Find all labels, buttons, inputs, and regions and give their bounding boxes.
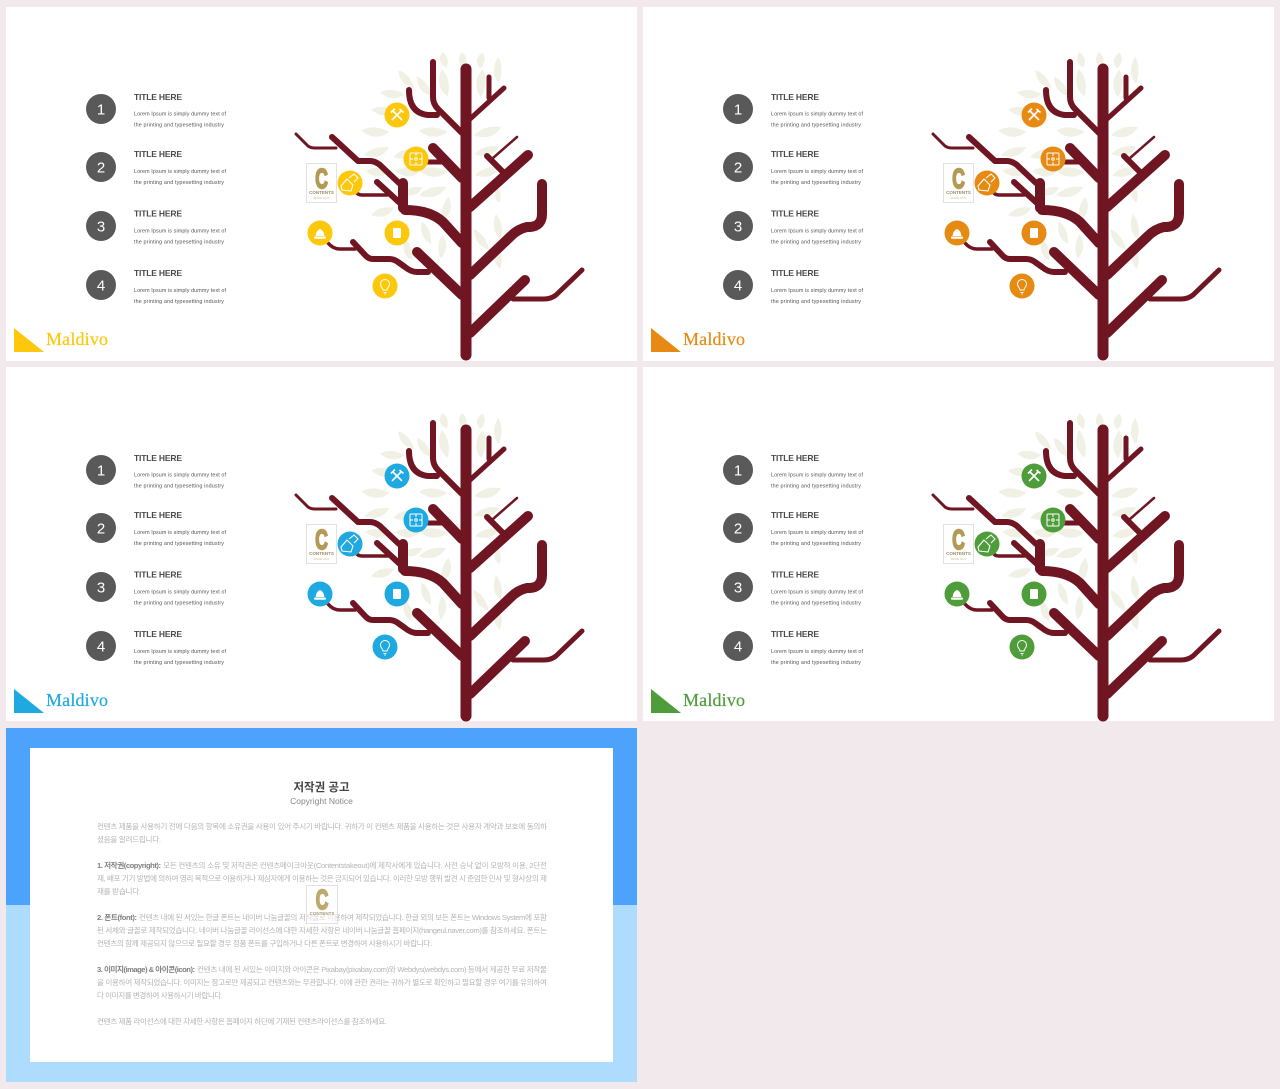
numbered list: the printing and typesetting industry [134,122,224,128]
contents badge [944,163,974,202]
numbered list: Lorem Ipsum is simply dummy text of [134,530,226,536]
numbered list: TITLE HERE [771,510,819,520]
numbered list [86,453,226,666]
heading: copyright: 저작권 공고 [293,780,350,794]
numbered list: 3 [734,580,742,596]
tree illustration [933,51,1219,355]
numbered list: TITLE HERE [134,149,182,159]
notice body text: 컨텐츠 내에 된 서있는 한글 폰트는 네이버 나눔글꼴의 저작물로 이용하여 제작되었습니다. 한글 외의 보든 폰트는 Windows System에 포함 [139,912,547,922]
logo: Maldivo [651,328,745,352]
numbered list: Lorem Ipsum is simply dummy text of [134,169,226,175]
logo: Maldivo: Maldivo [683,329,745,349]
icon markers [944,464,1066,660]
contents badge: MAKE OUT [951,557,966,561]
logo: Maldivo [651,689,745,713]
numbered list: the printing and typesetting industry [771,180,861,186]
numbered list: 4 [97,638,105,656]
tree illustration [296,412,582,716]
logo: Maldivo: Maldivo [46,690,108,710]
contents badge: C [952,163,965,194]
numbered list: TITLE HERE [134,92,182,102]
contents badge watermark: C [316,884,328,915]
heading: copyright [290,780,353,806]
numbered list: TITLE HERE [771,149,819,159]
notice body text: 을 이용하여 제작되었습니다. 이미지는 참고로만 제공되고 컨텐츠와는 무관합니다. 이에 관한 권리는 귀하가 별도로 확인하고 필요할 경우 여기를 유의하여 [97,977,547,987]
numbered list: Lorem Ipsum is simply dummy text of [134,288,226,294]
numbered list: TITLE HERE [771,453,819,463]
contents badge: C [315,524,328,555]
numbered list: 3 [97,218,105,236]
numbered list: the printing and typesetting industry [134,484,224,490]
numbered list: Lorem Ipsum is simply dummy text of [771,228,864,234]
numbered list [723,453,864,666]
numbered list: TITLE HERE [134,453,182,463]
logo: Maldivo [14,328,108,352]
contents badge: MAKE OUT [314,196,329,200]
contents badge: CONTENTS [946,190,971,195]
numbered list: the printing and typesetting industry [771,600,861,606]
contents badge: CONTENTS [946,551,971,556]
numbered list: 2 [734,520,742,538]
contents badge: CONTENTS [309,551,334,556]
numbered list: the printing and typesetting industry [134,299,224,305]
logo: Maldivo [14,689,108,713]
numbered list: Lorem Ipsum is simply dummy text of [134,590,226,596]
numbered list: 1 [97,462,105,480]
notice body text: 1. 저작권(copyright): [97,860,161,870]
numbered list: Lorem Ipsum is simply dummy text of [771,169,864,175]
contents badge: C [952,524,965,555]
numbered list: the printing and typesetting industry [134,180,224,186]
notice body text: 컨텐츠의 함께 제공되지 않으므로 필요할 경우 정품 폰트를 구입하거나 다른 폰트로 변경하여 사용하시기 바랍니다. [97,938,432,948]
heading: copyright: Copyright Notice [290,796,353,806]
numbered list: Lorem Ipsum is simply dummy text of [134,649,226,655]
tree illustration [296,51,582,355]
contents badge: MAKE OUT [951,196,966,200]
numbered list: TITLE HERE [771,570,819,580]
numbered list: TITLE HERE [134,208,182,218]
numbered list: TITLE HERE [771,92,819,102]
numbered list [723,92,864,305]
numbered list: TITLE HERE [771,208,819,218]
numbered list: 3 [97,580,105,596]
numbered list: the printing and typesetting industry [134,600,224,606]
numbered list: the printing and typesetting industry [771,660,861,666]
numbered list: 4 [734,278,742,294]
numbered list: 2 [97,520,105,538]
contents badge: CONTENTS [309,190,334,195]
numbered list: TITLE HERE [134,570,182,580]
notice body text: 2. 폰트(font): [97,913,137,922]
numbered list: the printing and typesetting industry [134,660,224,666]
contents badge: C [315,163,328,194]
numbered list: 2 [97,160,105,176]
numbered list: TITLE HERE [771,268,819,278]
panel: copyright notice [6,728,637,1082]
numbered list: TITLE HERE [134,629,182,639]
contents badge: MAKE OUT [314,557,329,561]
panel: yellow slide [6,7,637,361]
numbered list: Lorem Ipsum is simply dummy text of [771,112,864,118]
logo: Maldivo: Maldivo [46,329,108,349]
numbered list: 1 [734,462,742,480]
contents badge watermark [306,884,338,924]
numbered list: Lorem Ipsum is simply dummy text of [771,288,864,294]
numbered list: 3 [734,218,742,236]
notice body text: 컨텐츠 내에 된 서있는 이미지와 아이콘은 Pixabay(pixabay.com)와 Webdys(webdys.com) 등에서 제공한 무료 저작물 [197,964,547,974]
notice body text: 모든 컨텐츠의 소유 및 저작권은 컨텐츠메이크아웃(Contentstakeout)에 제작사에게 있습니다. 사전 승낙 없이 모방적 이용, 2단전 [163,860,547,870]
contents badge [306,524,336,564]
contents badge [944,524,974,564]
notice body text: 재, 배포 기기 방법에 의하여 영리 목적으로 이용하거나 제삼자에게 이용하는 것은 금지되어 있습니다. 이러한 모방 행위 발견 시 준엄한 민사 및 형사상의 제 [97,873,547,883]
numbered list: 4 [97,278,105,294]
numbered list: Lorem Ipsum is simply dummy text of [771,472,864,478]
notice body text: 컨텐츠 제품 라이선스에 대한 자세한 사항은 홈페이지 하단에 기재된 컨텐츠라이선스를 참조하세요. [97,1016,387,1026]
notice body text: 다 이미지를 변경하여 사용하시기 바랍니다. [97,990,223,1000]
numbered list: Lorem Ipsum is simply dummy text of [771,649,864,655]
icon markers [308,102,428,298]
numbered list [86,92,226,305]
numbered list: the printing and typesetting industry [771,240,861,246]
contents badge [306,163,336,202]
numbered list: Lorem Ipsum is simply dummy text of [134,472,226,478]
notice body text: 셨음을 알려드립니다. [97,834,161,844]
numbered list: TITLE HERE [771,629,819,639]
icon markers [308,464,428,660]
numbered list: the printing and typesetting industry [771,541,861,547]
numbered list: 1 [734,102,742,118]
notice body text: 재를 받습니다. [97,886,141,896]
contents badge watermark: CONTENTS [310,911,334,916]
numbered list: the printing and typesetting industry [771,299,861,305]
numbered list: Lorem Ipsum is simply dummy text of [134,112,226,118]
numbered list: TITLE HERE [134,268,182,278]
notice body text [97,821,547,1026]
tree illustration [933,412,1219,716]
panel: blue slide [6,367,637,721]
numbered list: the printing and typesetting industry [134,541,224,547]
logo: Maldivo: Maldivo [683,690,745,710]
numbered list: Lorem Ipsum is simply dummy text of [134,228,226,234]
numbered list: the printing and typesetting industry [771,122,861,128]
panel: orange slide [643,7,1274,361]
numbered list: 2 [734,160,742,176]
numbered list: Lorem Ipsum is simply dummy text of [771,530,864,536]
panel: green slide [643,367,1274,721]
numbered list: 1 [97,102,105,118]
numbered list: the printing and typesetting industry [134,240,224,246]
icon markers [944,102,1066,298]
notice body text: 3. 이미지(image) & 아이콘(icon): [97,964,195,974]
numbered list: 4 [734,638,742,656]
numbered list: the printing and typesetting industry [771,484,861,490]
notice body text: 컨텐츠 제품을 사용하기 전에 다음의 항목에 소유권을 사용이 있어 주시기 바랍니다. 귀하가 이 컨텐츠 제품을 사용하는 것은 사용자 계약과 보호에 동의하 [97,821,547,831]
numbered list: TITLE HERE [134,510,182,520]
notice body text: 된 서체와 글꼴로 제작되었습니다. 네이버 나눔글꼴 라이선스에 대한 자세한 사항은 네이버 나눔글꼴 홈페이지(hangeul.naver.com)를 참조하세요. 폰트는 [97,925,547,935]
numbered list: Lorem Ipsum is simply dummy text of [771,590,864,596]
